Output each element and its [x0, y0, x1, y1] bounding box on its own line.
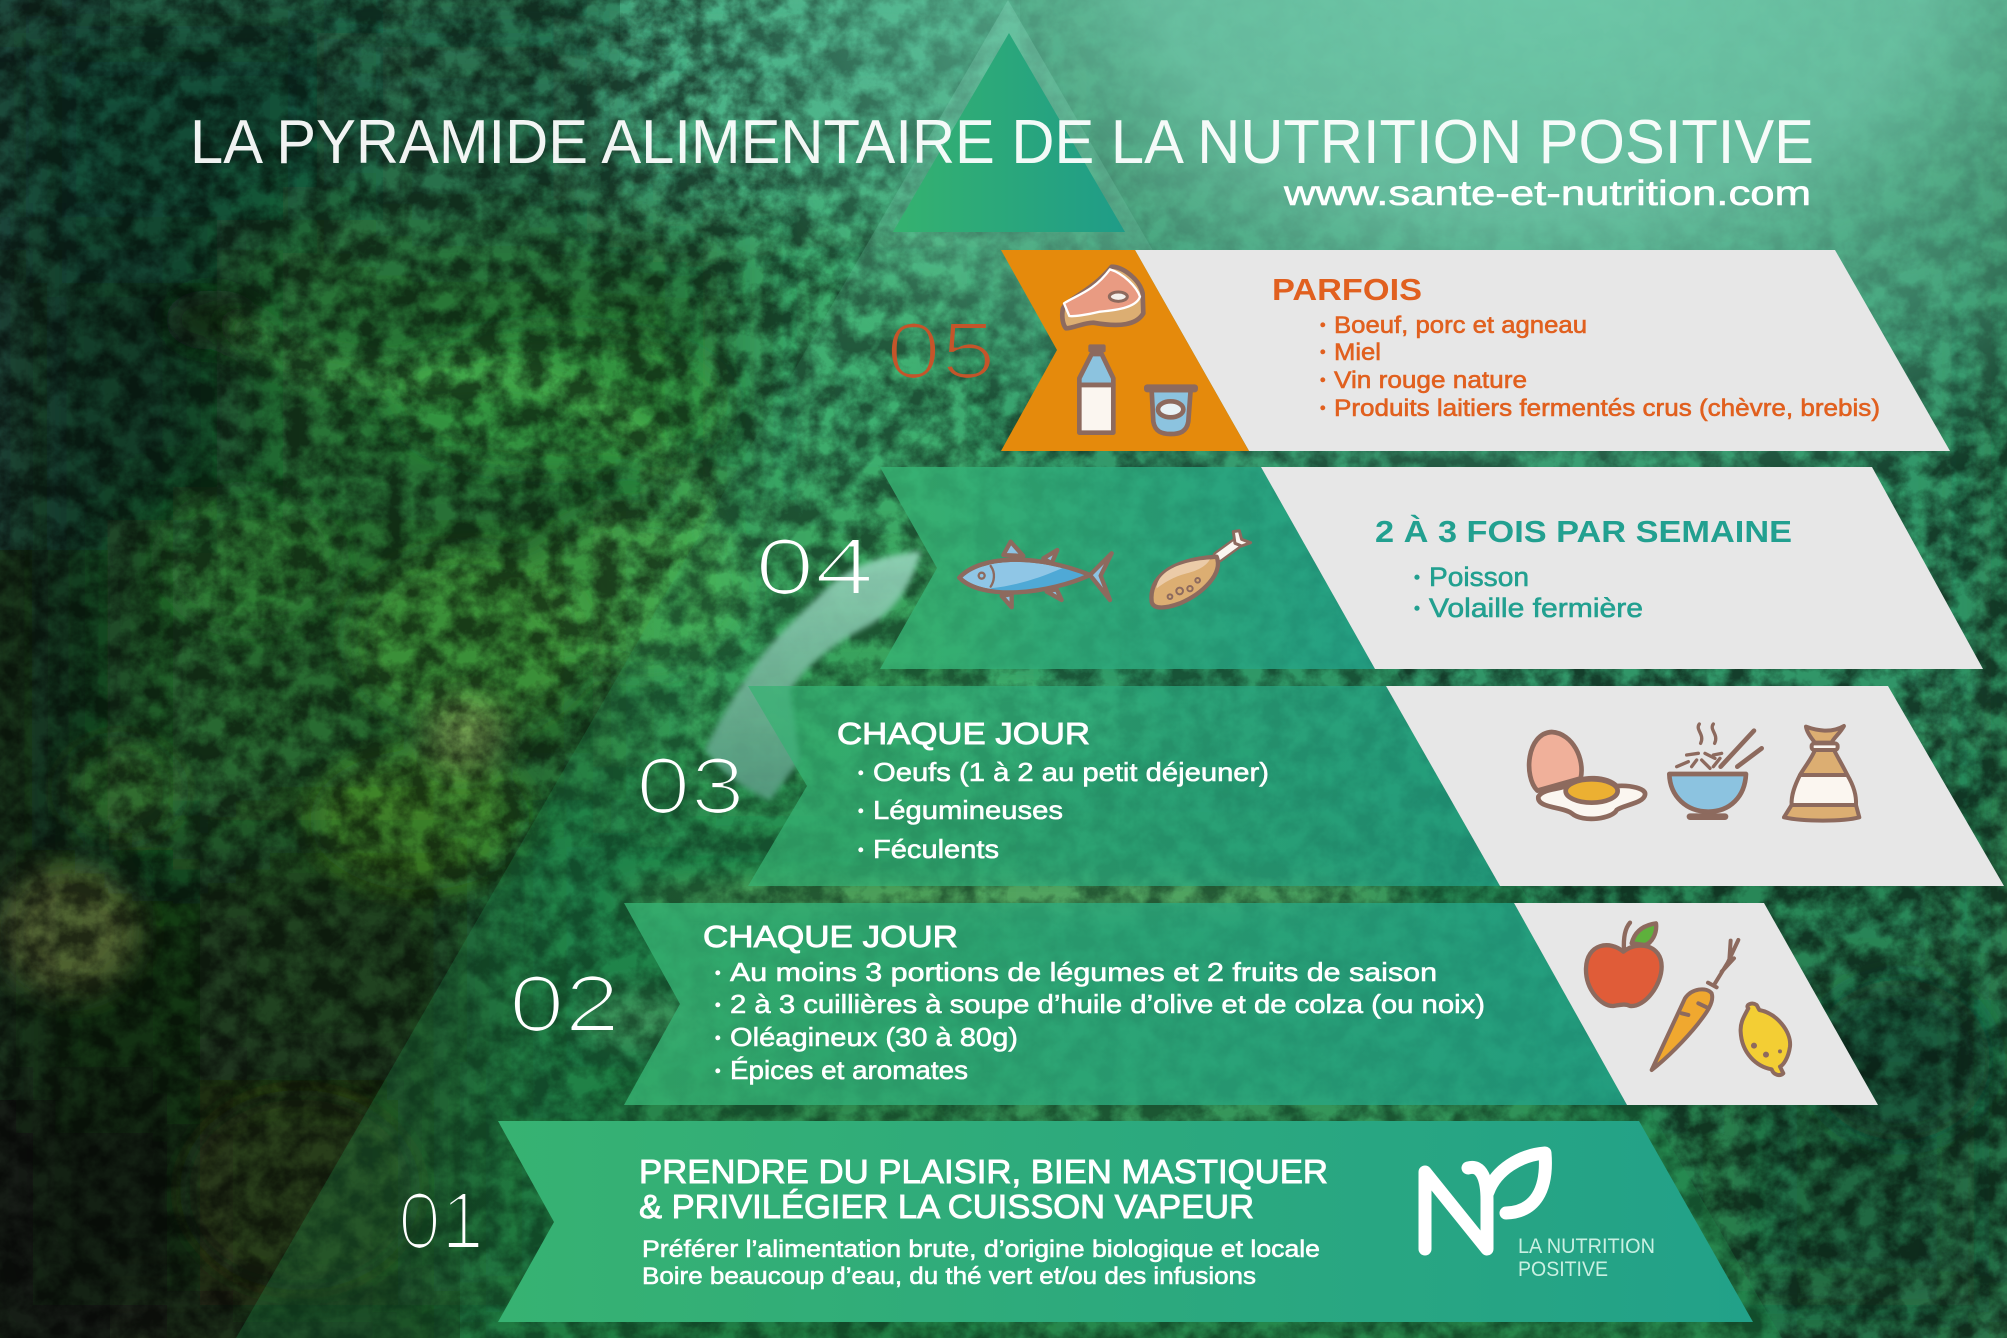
list: oeufs, legumineuses, feculents: • [858, 803, 864, 820]
tier 02 number: 02 [509, 959, 620, 1048]
list: legumes, huiles, oleagineux, epices: Oléagineux (30 à 80g) [730, 1022, 1018, 1052]
icon: lemon [1741, 1004, 1790, 1075]
list: legumes, huiles, oleagineux, epices: • [715, 1030, 721, 1047]
logo wordmark: POSITIVE [1518, 1258, 1608, 1281]
list: legumes, huiles, oleagineux, epices: • [715, 965, 721, 982]
heading: prendre du plaisir: PRENDRE DU PLAISIR, BIEN MASTIQUER [639, 1153, 1328, 1190]
heading: chaque jour: CHAQUE JOUR [837, 716, 1090, 751]
list: oeufs, legumineuses, feculents: • [858, 765, 864, 782]
title: LA PYRAMIDE ALIMENTAIRE DE LA NUTRITION POSITIVE [190, 108, 1814, 177]
tier 01: base [398, 1121, 1753, 1322]
icon: rice bowl [1669, 724, 1762, 817]
tier 05 orange arrow [1001, 250, 1249, 451]
text: alimentation et boisson [642, 1236, 1320, 1290]
list: legumes, huiles, oleagineux, epices: Épices et aromates [730, 1055, 968, 1085]
tier 05 grey panel [1135, 250, 1950, 451]
icon: yogurt [1144, 384, 1198, 434]
icon: meat [1062, 267, 1143, 328]
tier 02 grey panel [1514, 903, 1878, 1105]
list: oeufs, legumineuses, feculents: Oeufs (1 à 2 au petit déjeuner) [873, 757, 1269, 787]
pyramid summit triangle [893, 33, 1125, 232]
tier 04 grey panel [1261, 467, 1983, 669]
heading: chaque jour: CHAQUE JOUR [703, 919, 958, 954]
list: poisson, volaille: • [1414, 568, 1420, 587]
list: parfois items [1320, 312, 1880, 422]
icon: fish [959, 542, 1112, 607]
website url: www.sante-et-nutrition.com [1283, 174, 1811, 213]
list: oeufs, legumineuses, feculents: Féculents [873, 834, 999, 864]
tier 03 green arrow [748, 686, 1500, 886]
icon: chicken leg [1151, 531, 1251, 607]
heading: prendre du plaisir [639, 1153, 1328, 1225]
list: poisson, volaille: Poisson [1429, 562, 1529, 592]
tier 03 grey panel [1386, 686, 2004, 886]
tier 02 green arrow [624, 903, 1627, 1105]
list: parfois items: Produits laitiers fermentés crus (chèvre, brebis) [1334, 395, 1880, 422]
logo wordmark [1518, 1235, 1655, 1281]
tier 01 green arrow [498, 1121, 1753, 1322]
tier 01 number: 01 [398, 1176, 484, 1265]
list: poisson, volaille: • [1414, 599, 1420, 618]
tier 04: 2 a 3 fois par semaine [755, 467, 1983, 669]
tier 02: chaque jour [509, 903, 1878, 1105]
tier 03 number: 03 [636, 741, 745, 830]
list: parfois items: • [1320, 317, 1326, 334]
logo wordmark: LA NUTRITION [1518, 1235, 1655, 1258]
tier 05: parfois [886, 250, 1950, 451]
icon: egg [1529, 732, 1645, 819]
list: oeufs, legumineuses, feculents [858, 757, 1269, 864]
logo: la nutrition positive [1425, 1153, 1655, 1281]
list: legumes, huiles, oleagineux, epices: • [715, 997, 721, 1014]
list: legumes, huiles, oleagineux, epices [715, 957, 1485, 1085]
heading: 2 a 3 fois par semaine: 2 À 3 FOIS PAR SEMAINE [1375, 514, 1792, 549]
list: poisson, volaille [1414, 562, 1643, 623]
tier 04 number: 04 [755, 522, 874, 611]
icon: flour sack [1784, 726, 1859, 821]
fog over the top right [0, 0, 2007, 600]
list: parfois items: • [1320, 372, 1326, 389]
list: oeufs, legumineuses, feculents: Légumineuses [873, 795, 1063, 825]
icon: apple [1586, 923, 1662, 1006]
heading: prendre du plaisir: & PRIVILÉGIER LA CUISSON VAPEUR [639, 1188, 1254, 1225]
list: poisson, volaille: Volaille fermière [1429, 593, 1643, 623]
list: legumes, huiles, oleagineux, epices: • [715, 1063, 721, 1080]
river [705, 551, 921, 800]
text: alimentation et boisson: Préférer l’alimentation brute, d’origine biologique et locale [642, 1236, 1320, 1263]
icon: milk bottle [1079, 344, 1113, 433]
large translucent pyramid [236, 0, 1782, 1338]
list: parfois items: • [1320, 400, 1326, 417]
tier 05 number: 05 [886, 306, 996, 395]
list: parfois items: Miel [1334, 339, 1381, 366]
list: parfois items: Vin rouge nature [1334, 367, 1527, 394]
icon: carrot [1652, 940, 1738, 1070]
list: parfois items: • [1320, 344, 1326, 361]
list: parfois items: Boeuf, porc et agneau [1334, 312, 1587, 339]
text: alimentation et boisson: Boire beaucoup d’eau, du thé vert et/ou des infusions [642, 1263, 1256, 1290]
tier 03: chaque jour [636, 686, 2004, 886]
heading: parfois: PARFOIS [1272, 272, 1422, 307]
list: oeufs, legumineuses, feculents: • [858, 842, 864, 859]
tier 04 green arrow [880, 467, 1375, 669]
list: legumes, huiles, oleagineux, epices: Au moins 3 portions de légumes et 2 fruits de saison [730, 957, 1437, 987]
logo mark: N with leaf [1425, 1153, 1545, 1249]
list: legumes, huiles, oleagineux, epices: 2 à 3 cuillières à soupe d’huile d’olive et de colza (ou noix) [730, 989, 1485, 1019]
